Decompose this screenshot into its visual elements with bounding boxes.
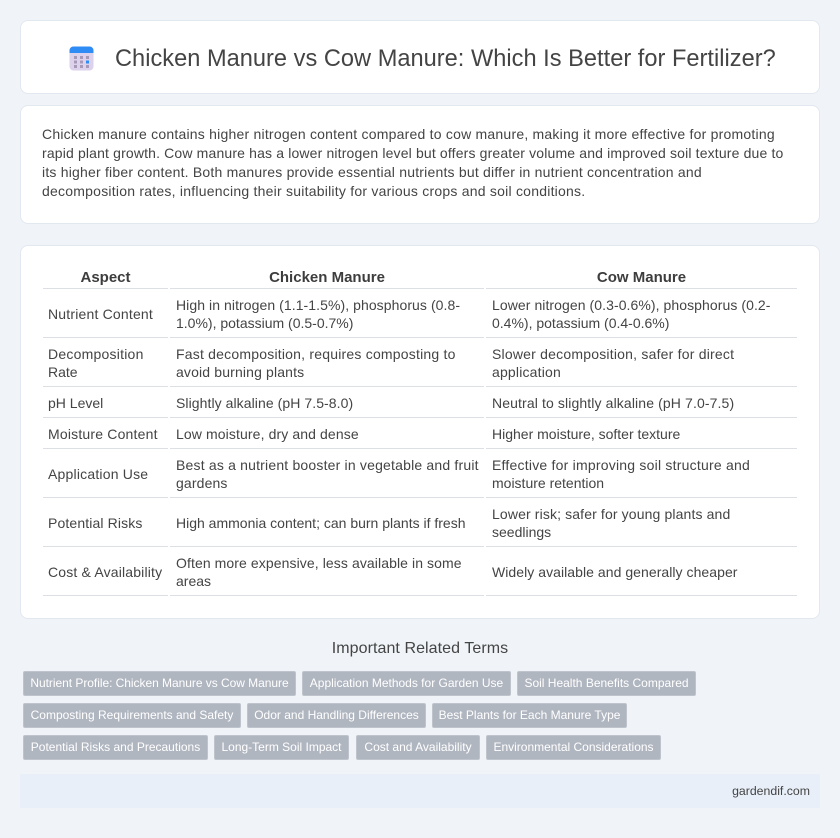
table header <box>43 269 797 289</box>
row: pH level: pH Level <box>48 395 103 411</box>
panel: introduction text: decomposition rates, influencing their suitability for various crops and soil conditions. <box>42 183 585 199</box>
row: cost and availability <box>43 555 797 596</box>
tag list: related terms: Long-Term Soil Impact <box>221 740 342 754</box>
row: moisture content: Low moisture, dry and dense <box>176 426 359 442</box>
row: moisture content <box>43 426 797 449</box>
tag list: related terms: Potential Risks and Precautions <box>31 740 200 754</box>
tag list: related terms: Cost and Availability <box>364 740 472 754</box>
tag list: related terms: Best Plants for Each Manure Type <box>439 708 620 722</box>
footer source text: gardendif.com <box>732 784 810 798</box>
row: application use: gardens <box>176 475 228 491</box>
row: decomposition rate: Slower decomposition, safer for direct <box>492 346 734 362</box>
row: nutrient content: Nutrient Content <box>48 306 153 322</box>
tag list: related terms <box>23 671 696 760</box>
row: pH level <box>43 395 797 418</box>
row: cost and availability: areas <box>176 573 211 589</box>
row: potential risks <box>43 506 797 547</box>
row: nutrient content <box>43 297 797 338</box>
row: cost and availability: Cost & Availability <box>48 564 162 580</box>
tag list: related terms: Nutrient Profile: Chicken Manure vs Cow Manure <box>30 676 289 690</box>
row: application use: Best as a nutrient booster in vegetable and fruit <box>176 457 479 473</box>
tag list: related terms: Composting Requirements and Safety <box>31 708 233 722</box>
row: potential risks: Potential Risks <box>48 515 143 531</box>
row: decomposition rate: application <box>492 364 561 380</box>
row: nutrient content: Lower nitrogen (0.3-0.6%), phosphorus (0.2- <box>492 297 770 313</box>
row: nutrient content: 0.4%), potassium (0.4-0.6%) <box>492 315 669 331</box>
row: decomposition rate: Decomposition <box>48 346 144 362</box>
row: application use <box>43 457 797 498</box>
row: potential risks: High ammonia content; can burn plants if fresh <box>176 515 466 531</box>
table header: Cow Manure <box>597 269 686 286</box>
icon: calendar grid <box>70 46 94 70</box>
row: potential risks: seedlings <box>492 524 551 540</box>
row: potential risks: Lower risk; safer for young plants and <box>492 506 730 522</box>
title: Chicken Manure vs Cow Manure: Which Is Better for Fertilizer? <box>115 46 776 72</box>
panel: introduction text: its higher fiber content. Both manures provide essential nutrients but differ in nutrient concentration and <box>42 164 702 180</box>
row: pH level: Neutral to slightly alkaline (pH 7.0-7.5) <box>492 395 734 411</box>
panel: header <box>20 20 820 94</box>
row: application use: Application Use <box>48 466 148 482</box>
footer bar <box>20 774 820 808</box>
row: moisture content: Moisture Content <box>48 426 158 442</box>
row: decomposition rate: Rate <box>48 364 78 380</box>
panel: introduction text: Chicken manure contains higher nitrogen content compared to cow manure, making it more effective for promoting <box>42 126 775 142</box>
table header: Chicken Manure <box>269 269 385 286</box>
panel: comparison table <box>20 245 820 619</box>
row: pH level: Slightly alkaline (pH 7.5-8.0) <box>176 395 353 411</box>
heading: important related terms: Important Related Terms <box>332 640 508 657</box>
row: decomposition rate: Fast decomposition, requires composting to <box>176 346 456 362</box>
panel: introduction text <box>20 105 820 224</box>
row: decomposition rate <box>43 346 797 387</box>
tag list: related terms: Odor and Handling Differences <box>254 708 419 722</box>
row: application use: moisture retention <box>492 475 604 491</box>
row: nutrient content: 1.0%), potassium (0.5-0.7%) <box>176 315 353 331</box>
row: moisture content: Higher moisture, softer texture <box>492 426 680 442</box>
table header: Aspect <box>80 269 131 286</box>
row: application use: Effective for improving soil structure and <box>492 457 750 473</box>
row: nutrient content: High in nitrogen (1.1-1.5%), phosphorus (0.8- <box>176 297 460 313</box>
tag list: related terms: Environmental Considerations <box>493 740 654 754</box>
row: cost and availability: Often more expensive, less available in some <box>176 555 462 571</box>
row: cost and availability: Widely available and generally cheaper <box>492 564 738 580</box>
tag list: related terms: Application Methods for Garden Use <box>310 676 503 690</box>
tag list: related terms: Soil Health Benefits Compared <box>524 676 689 690</box>
row: decomposition rate: avoid burning plants <box>176 364 304 380</box>
panel: introduction text: rapid plant growth. Cow manure has a lower nitrogen level but offers greater volume and improved soil texture due to <box>42 145 783 161</box>
